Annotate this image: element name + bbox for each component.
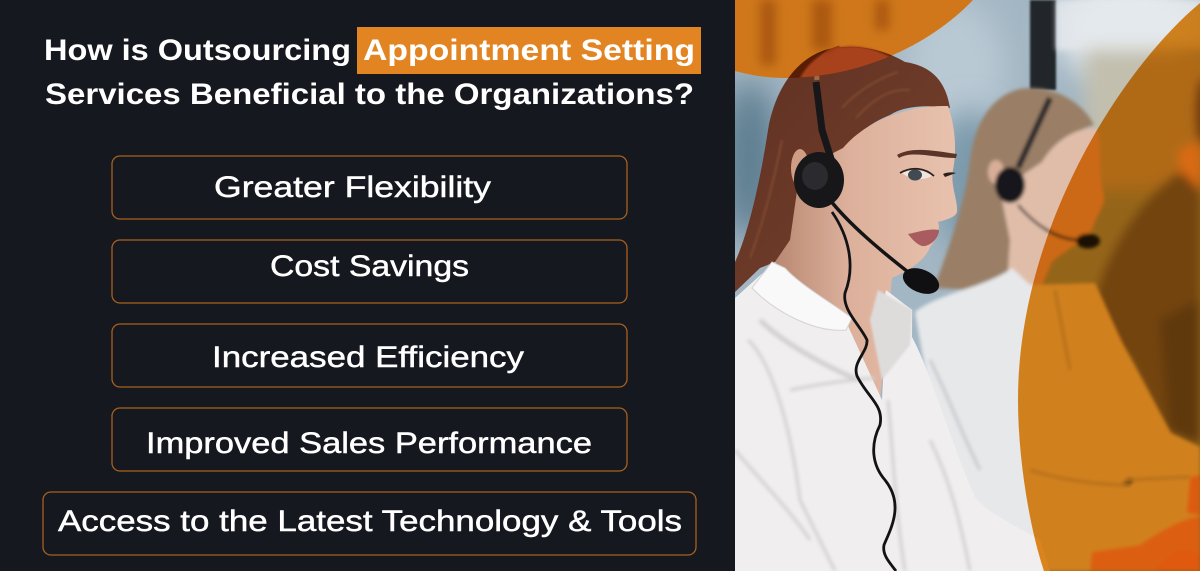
title highlight box xyxy=(357,27,701,74)
benefit: Access to the Latest Technology and Tools: Access to the Latest Technology & Tools xyxy=(58,505,682,538)
benefit: Cost Savings: Cost Savings xyxy=(270,250,469,283)
main agent shirt folds xyxy=(735,320,970,571)
benefit: Improved Sales Performance xyxy=(112,408,627,471)
blurred second agent xyxy=(915,88,1200,571)
main agent white shirt xyxy=(735,262,1050,571)
title xyxy=(44,27,701,111)
main agent right collar xyxy=(870,290,912,380)
benefit: Greater Flexibility: Greater Flexibility xyxy=(214,171,491,204)
benefit: Access to the Latest Technology and Tools xyxy=(43,492,696,555)
light base under top-left overlay xyxy=(735,0,975,80)
benefit: Increased Efficiency xyxy=(112,324,627,387)
benefit: Improved Sales Performance: Improved Sales Performance xyxy=(146,427,592,460)
background man xyxy=(1088,78,1200,445)
main agent hair highlights xyxy=(750,72,910,258)
headset cable xyxy=(832,212,896,571)
overlay texture: tree shadows in top-left shape xyxy=(760,0,889,65)
panel: dark text background xyxy=(0,0,735,571)
headset ear cup highlight xyxy=(802,162,828,190)
main agent face and neck xyxy=(775,106,957,400)
benefit: Increased Efficiency: Increased Efficiency xyxy=(212,341,524,374)
title line 2: Services Beneficial to the Organizations? xyxy=(45,78,694,111)
illustration: call centre agents with orange overlays xyxy=(720,0,1200,571)
main agent ear xyxy=(791,149,807,182)
main agent eye and brow xyxy=(897,150,957,180)
main agent collar xyxy=(752,262,852,330)
headset ear cup xyxy=(794,152,844,208)
benefit: Greater Flexibility xyxy=(112,156,627,219)
main agent lips xyxy=(908,229,939,246)
headset arm xyxy=(816,82,833,165)
microphone foam xyxy=(902,268,940,294)
benefit: Cost Savings xyxy=(112,240,627,303)
main agent hair xyxy=(735,47,950,292)
title line 1 highlighted phrase: Appointment Setting xyxy=(363,34,695,67)
headset headband xyxy=(817,48,840,80)
soft shirt shading on second agent xyxy=(930,290,1190,485)
overlay: top-left orange shape xyxy=(735,0,973,78)
title line 1 lead: How is Outsourcing xyxy=(44,34,351,67)
microphone boom xyxy=(830,200,908,272)
overlay: right orange shape xyxy=(1018,3,1200,571)
overlay hair tint: red hair under top-left shape xyxy=(800,46,895,80)
